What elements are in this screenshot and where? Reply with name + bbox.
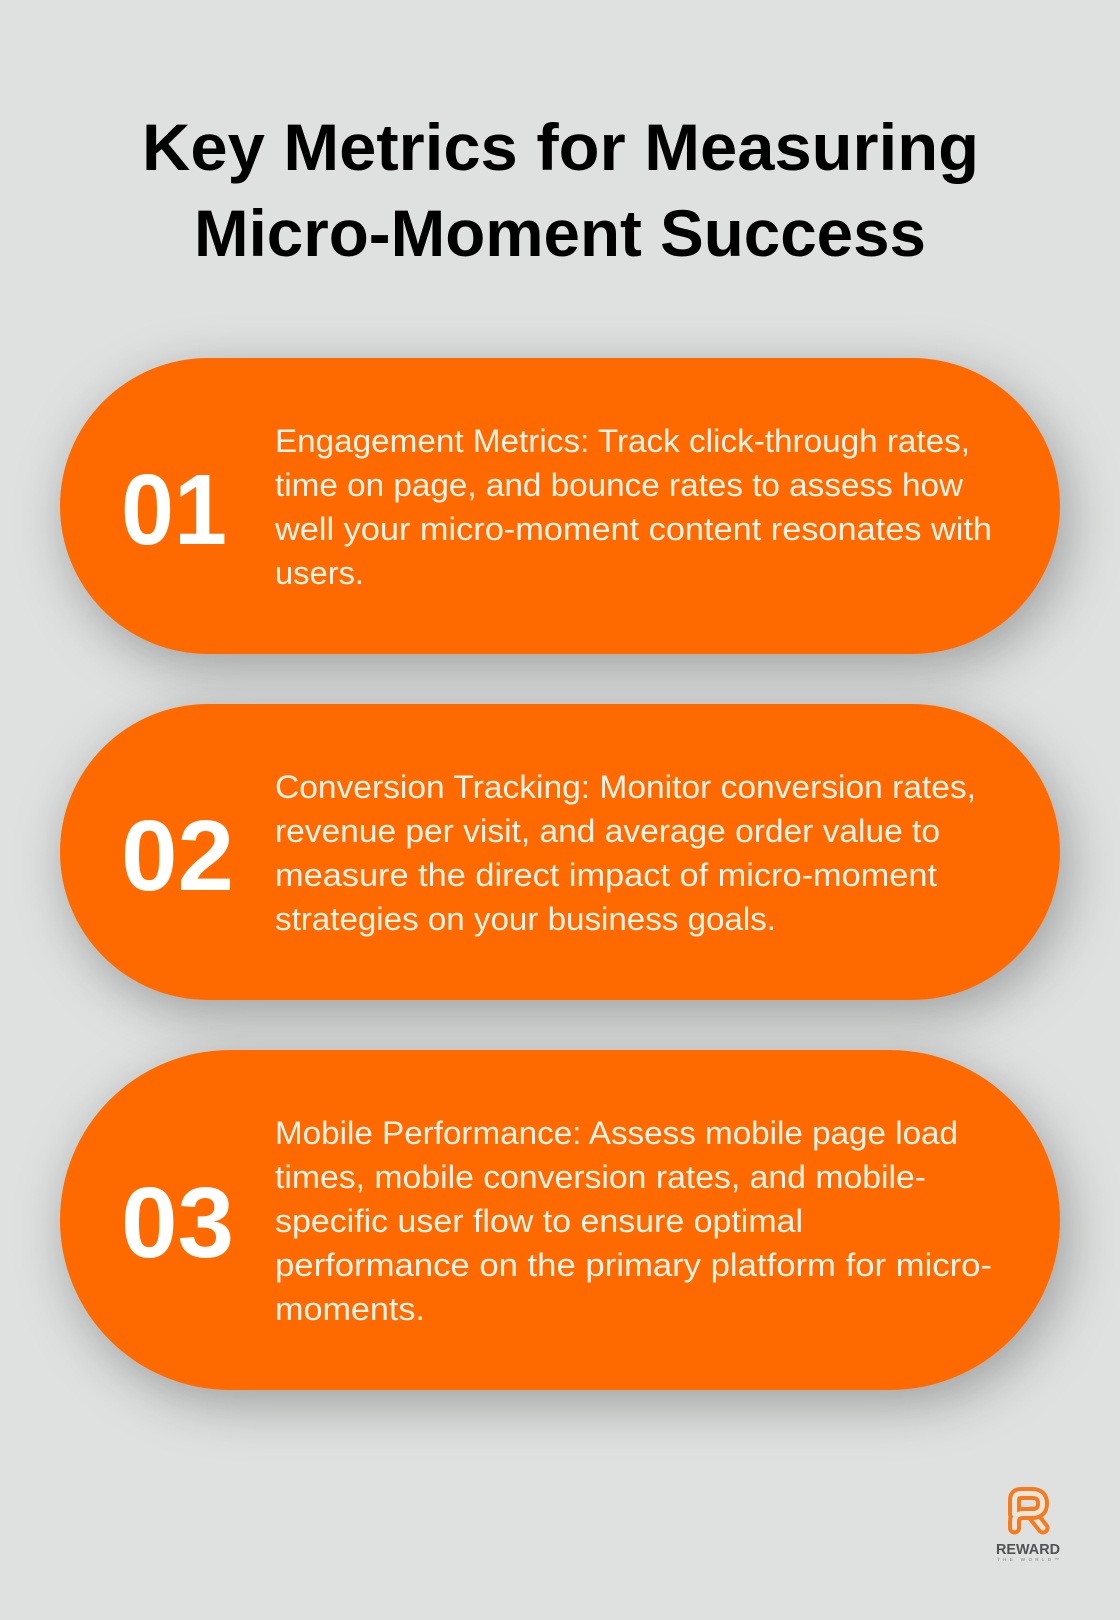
text block 02 — [275, 769, 976, 937]
text block 01 — [274, 423, 992, 591]
panel: engagement metrics — [60, 358, 1060, 654]
pill background 02 — [60, 704, 1060, 1000]
text block 02: revenue per visit, and average order value to — [275, 813, 940, 849]
text block 01: users. — [275, 555, 364, 591]
text block 03: moments. — [275, 1291, 425, 1327]
icon: stylised R — [1014, 1494, 1043, 1528]
pill background 01 — [60, 358, 1060, 654]
text block 02: strategies on your business goals. — [275, 901, 776, 937]
title — [142, 110, 979, 270]
pill background 03 — [60, 1050, 1060, 1390]
text block 03: specific user flow to ensure optimal — [275, 1203, 803, 1239]
text block 03: times, mobile conversion rates, and mobile- — [275, 1159, 926, 1195]
text block 03: performance on the primary platform for micro- — [275, 1247, 992, 1283]
title: Key Metrics for Measuring — [142, 110, 979, 184]
text block 01: Engagement Metrics: Track click-through rates, — [275, 423, 970, 459]
text block 03: Mobile Performance: Assess mobile page load — [275, 1115, 958, 1151]
text block 01: well your micro-moment content resonates with — [274, 511, 992, 547]
text block 03 — [275, 1115, 992, 1327]
number 01: 01 — [121, 454, 227, 566]
logo tagline: THE WORLD™ — [997, 1557, 1059, 1562]
text block 02: Conversion Tracking: Monitor conversion rates, — [275, 769, 976, 805]
number 03: 03 — [121, 1167, 234, 1279]
number 02: 02 — [121, 800, 234, 912]
title: Micro-Moment Success — [194, 196, 926, 270]
panel: mobile performance — [60, 1050, 1060, 1390]
logo wordmark: REWARD — [996, 1541, 1060, 1558]
text block 01: time on page, and bounce rates to assess how — [275, 467, 964, 503]
panel: conversion tracking — [60, 704, 1060, 1000]
logo: Reward the World — [996, 1494, 1060, 1562]
text block 02: measure the direct impact of micro-moment — [275, 857, 937, 893]
